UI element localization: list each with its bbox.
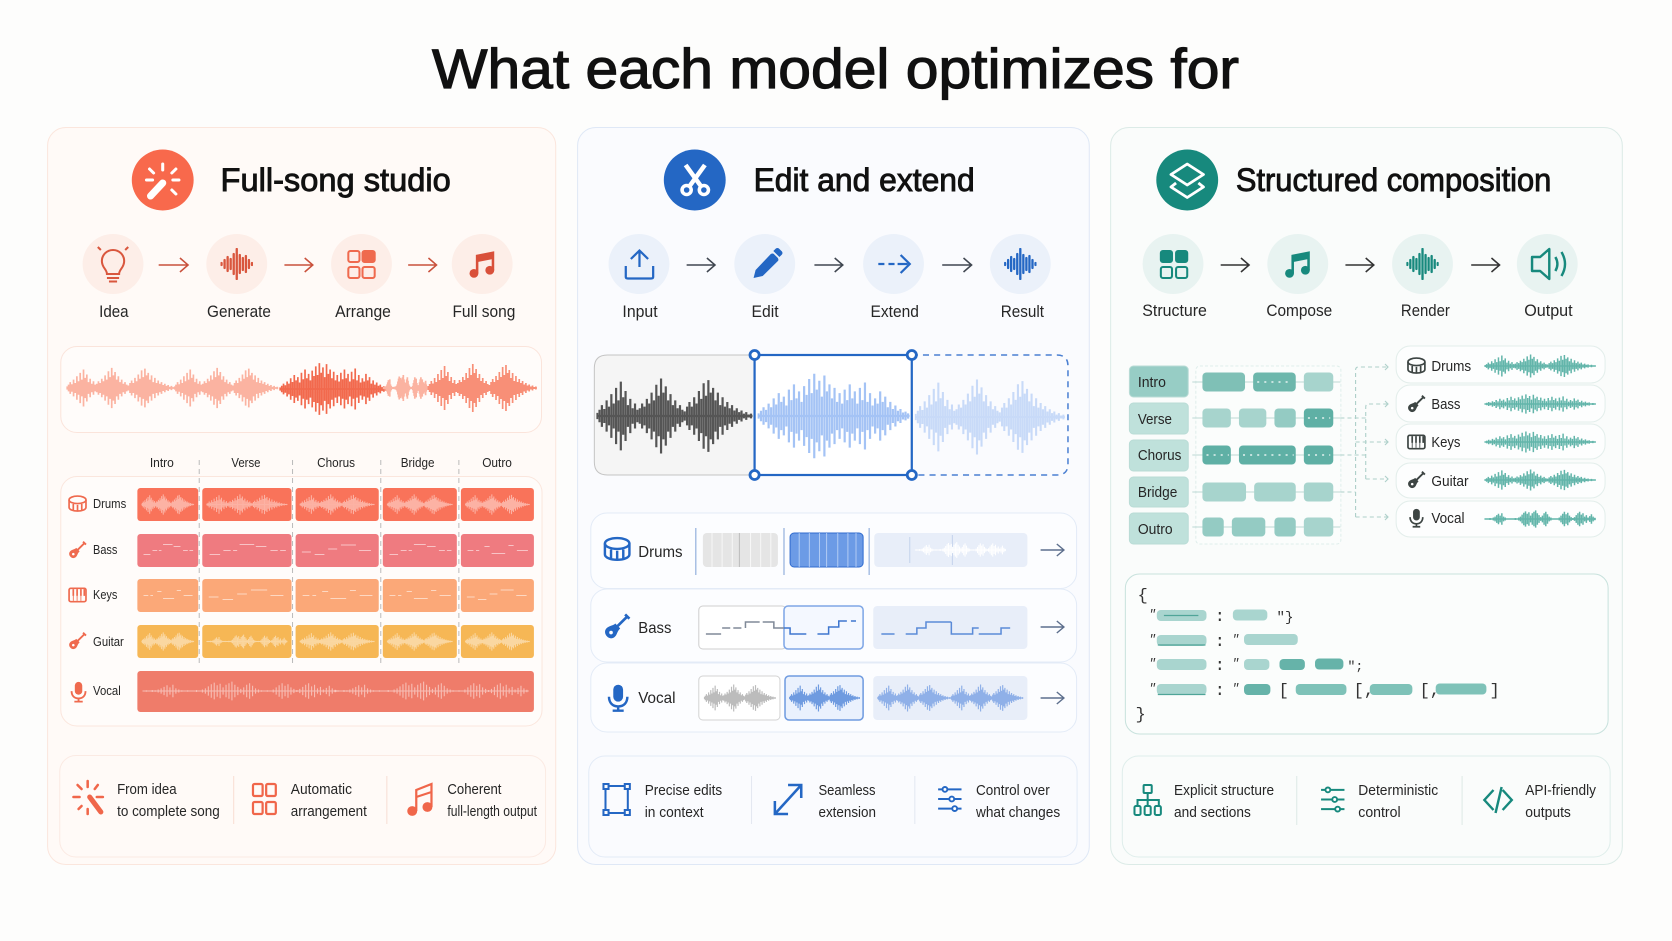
track row: bass [591,589,1077,662]
process flow: input to result: Input [622,302,658,321]
stem: vocal [1410,509,1596,528]
text: explicit structure: Explicit structure [1174,782,1274,799]
panel: edit and extend [578,128,1089,864]
section labels: Bridge [401,455,435,470]
text: automatic arrangement: Automatic [291,781,352,798]
icon: note [408,784,431,815]
process flow: idea to full song: Arrange [335,302,391,321]
track row: vocal [591,663,1077,732]
process flow: input to result: Edit [752,302,779,321]
section labels: Verse [231,455,260,470]
code block: JSON schema: " [1232,633,1239,647]
panel heading: structured composition [1156,150,1551,210]
text: automatic arrangement: arrangement [291,803,368,820]
process flow: structure to output: Render [1401,301,1450,320]
icon: pencil [754,248,782,278]
stem: guitar [1408,469,1596,491]
code block: JSON schema: " [1149,682,1156,696]
process flow: structure to output: Compose [1266,301,1332,320]
code block: JSON schema: ] [1489,682,1500,701]
stem: drums: Drums [1431,358,1471,375]
code block: JSON schema: : [1215,682,1225,701]
icon: lightbulb [98,247,128,282]
icon: arrange grid [348,251,375,278]
panel heading: edit and extend [664,150,975,210]
code block: JSON schema: " [1232,657,1239,671]
process flow: input to result [609,234,1051,321]
arrows [687,258,972,272]
waveform editor [594,350,1068,480]
track: vocal: Vocal [93,683,121,698]
full song waveform [61,346,542,432]
icon: music note [470,253,494,278]
icon: magic wand [73,781,103,814]
panel heading: edit and extend: Edit and extend [754,162,975,198]
code block: JSON schema: [, [1419,682,1440,701]
code block: JSON schema: [ [1278,682,1289,701]
process flow: idea to full song [83,234,515,321]
feature strip [60,756,546,857]
track row: drums [591,513,1077,588]
code block: JSON schema [1125,574,1608,734]
stem: bass [1408,394,1596,414]
text: seamless extension: Seamless [818,782,876,799]
code block: JSON schema: "; [1347,659,1363,674]
code block: JSON schema: { [1138,587,1148,606]
process flow: structure to output: Output [1524,301,1573,320]
track: keys [69,579,534,612]
section timeline blocks [1192,366,1341,544]
process flow: input to result: Result [1001,302,1044,321]
icon: hierarchy [1134,785,1161,815]
icon: speaker [1532,249,1565,279]
code block: JSON schema: " [1232,682,1239,696]
track row: bass: Bass [638,619,671,637]
section tags: Bridge [1138,484,1177,501]
icon: waveform [1005,249,1036,279]
icon: expand arrows [775,785,801,814]
text: precise edits: Precise edits [645,782,722,799]
icon: sliders [938,787,962,811]
arrangement tracks [61,460,542,726]
stem: keys: Keys [1431,434,1460,451]
code block: JSON schema: : [1215,608,1225,627]
section tags: Outro [1138,521,1173,538]
process flow: idea to full song: Full song [452,302,515,321]
stem: keys [1408,431,1596,453]
icon: waveform [222,249,252,279]
process flow: idea to full song: Generate [207,302,271,321]
stem: vocal: Vocal [1431,510,1465,527]
track: keys: Keys [93,587,118,602]
section tags: Verse [1138,411,1172,428]
track row: vocal: Vocal [638,689,675,707]
text: precise edits: in context [645,804,704,821]
icon: structure grid [1161,251,1187,278]
section tags: Chorus [1138,447,1181,464]
icon: code brackets [1484,787,1512,813]
track: bass: Bass [93,542,118,557]
code block: JSON schema: " [1149,633,1156,647]
code block: JSON schema: "} [1276,610,1293,626]
text: api-friendly outputs: API-friendly [1525,782,1596,799]
instrument stems [1396,346,1605,537]
icon: selection frame [603,784,630,815]
text: seamless extension: extension [818,804,876,821]
track: guitar [69,625,534,658]
feature strip [1122,756,1610,857]
stem: bass: Bass [1431,396,1460,413]
code block: JSON schema: : [1215,657,1225,676]
track: drums [69,488,534,521]
code block: JSON schema: [, [1354,682,1374,701]
track: bass [69,534,534,567]
text: from idea: to complete song [117,803,220,820]
track: drums: Drums [93,496,127,511]
track row: drums: Drums [638,543,683,561]
section labels [150,455,512,470]
text: control over what changes: what changes [975,804,1060,821]
panel: full-song studio [48,128,556,864]
text: from idea: From idea [117,781,177,798]
code block: JSON schema: " [1149,657,1156,671]
section tags [1129,366,1188,544]
icon: waveform [1407,249,1438,279]
track: guitar: Guitar [93,634,124,649]
stem: drums [1408,354,1596,378]
icon: grid [253,784,276,814]
icon: sliders [1321,787,1344,812]
code block: JSON schema: } [1135,706,1146,725]
icon: upload [626,250,653,278]
text: explicit structure: and sections [1174,804,1251,821]
text: coherent output: full-length output [447,803,538,820]
panel: structured composition [1111,128,1622,864]
dashed connectors [1340,364,1388,520]
track: vocal [72,671,534,712]
panel heading: full-song studio [132,150,451,210]
feature strip [589,756,1077,857]
code block: JSON schema: : [1215,633,1225,652]
section tags: Intro [1138,374,1166,391]
text: coherent output: Coherent [447,781,502,798]
icon: dashed arrow [878,255,910,273]
code block: JSON schema: " [1149,608,1156,622]
text: deterministic control: Deterministic [1358,782,1439,799]
panel heading: structured composition: Structured composition [1236,162,1551,198]
section labels: Chorus [317,455,355,470]
process flow: structure to output [1142,234,1578,320]
title: What each model optimizes for [432,37,1239,100]
process flow: idea to full song: Idea [99,302,129,321]
panel heading: full-song studio: Full-song studio [221,162,451,198]
arrows [1221,258,1500,272]
text: deterministic control: control [1358,804,1401,821]
process flow: structure to output: Structure [1142,301,1207,320]
arrows [159,258,437,272]
section labels: Outro [482,455,512,470]
icon: note [1285,253,1310,278]
section labels: Intro [150,455,174,470]
process flow: input to result: Extend [871,302,919,321]
stem: guitar: Guitar [1431,473,1469,490]
text: control over what changes: Control over [976,782,1050,799]
text: api-friendly outputs: outputs [1525,804,1571,821]
